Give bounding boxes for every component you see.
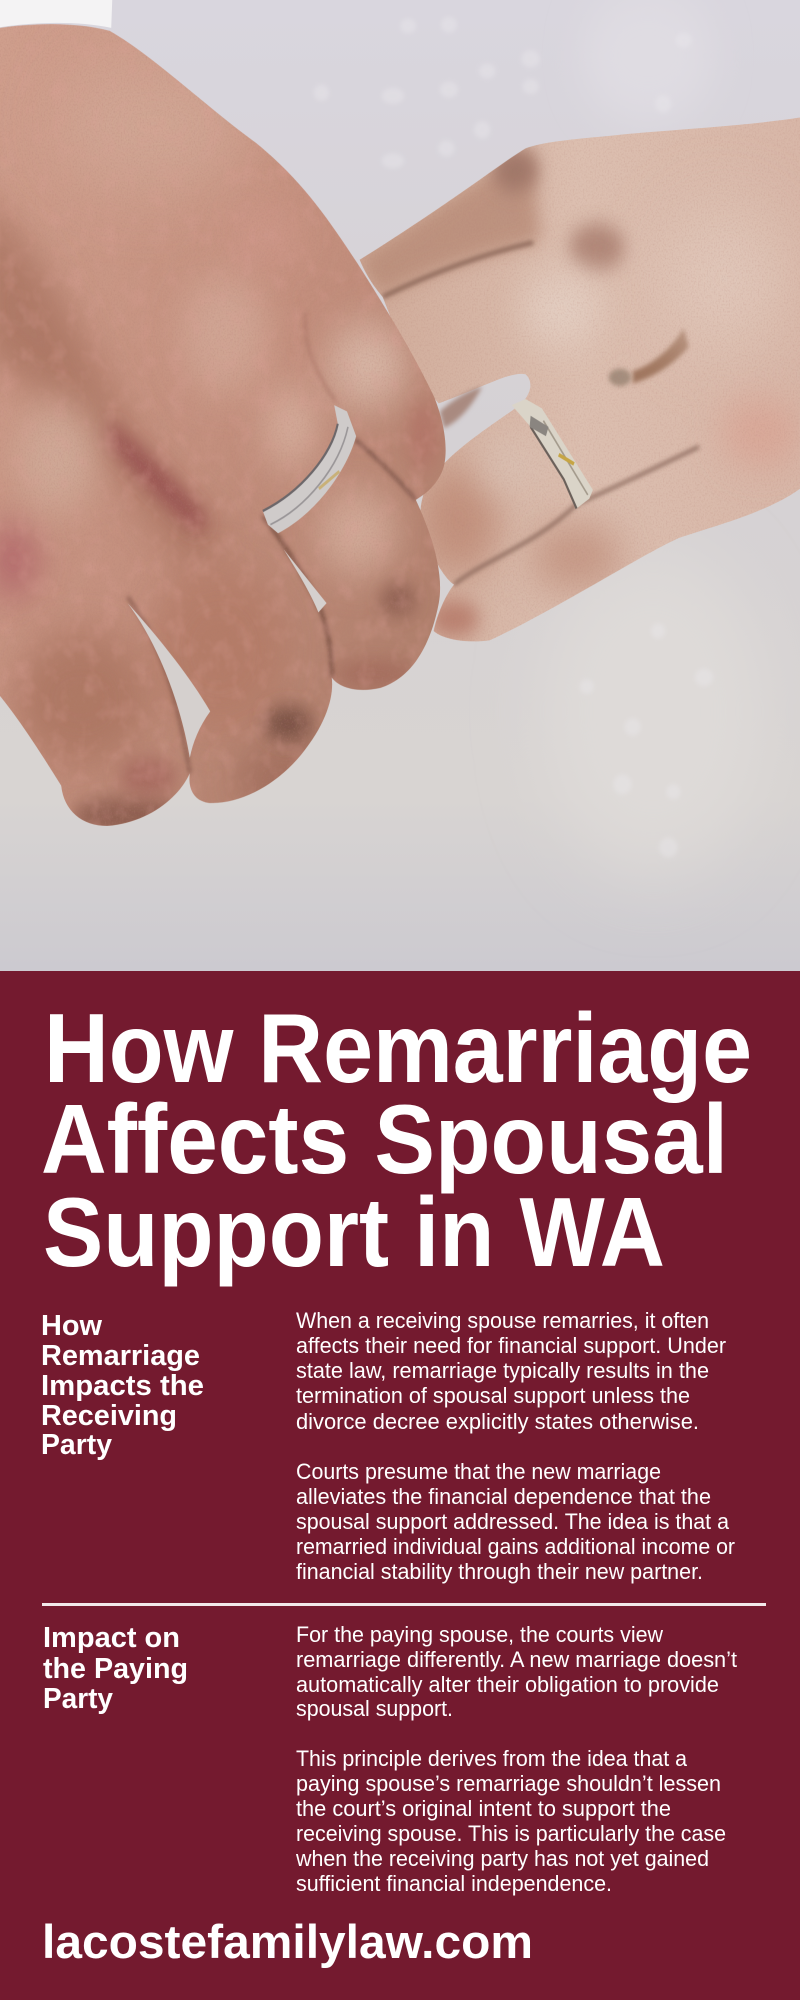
title: How Remarriage [44, 993, 752, 1103]
text block: receiving party, paragraph 1: When a receiving spouse remarries, it often [296, 1308, 709, 1333]
text block: receiving party, paragraph 2: financial stability through their new partner. [296, 1559, 703, 1584]
heading: how remarriage impacts the receiving party: How [41, 1310, 102, 1342]
text block: paying party, paragraph 1: remarriage differently. A new marriage doesn’t [296, 1647, 737, 1672]
ring on right hand [512, 399, 593, 508]
text block: paying party, paragraph 1: For the paying spouse, the courts view [296, 1622, 663, 1647]
heading: impact on the paying party: Impact on [43, 1622, 180, 1654]
text block: paying party, paragraph 2: the court’s original intent to support the [296, 1796, 671, 1821]
text block: receiving party, paragraph 2 [296, 1459, 735, 1584]
gap finger behind [440, 387, 482, 428]
text block: receiving party, paragraph 1: affects their need for financial support. Under [296, 1333, 726, 1358]
text block: receiving party, paragraph 2: Courts presume that the new marriage [296, 1459, 661, 1484]
title: Affects Spousal [41, 1084, 728, 1194]
footer website: lacostefamilylaw.com [42, 1915, 533, 1968]
heading: impact on the paying party [43, 1622, 188, 1715]
text block: paying party, paragraph 2: when the receiving party has not yet gained [295, 1846, 709, 1871]
right hand [357, 111, 800, 650]
heading: how remarriage impacts the receiving party: Remarriage [41, 1340, 200, 1372]
text block: paying party, paragraph 2: receiving spouse. This is particularly the case [296, 1821, 726, 1846]
text block: paying party, paragraph 2 [295, 1746, 726, 1896]
text block: paying party, paragraph 2: sufficient financial independence. [296, 1871, 612, 1896]
title [41, 993, 752, 1287]
text block: paying party, paragraph 1 [296, 1622, 737, 1721]
text block: paying party, paragraph 1: spousal support. [296, 1696, 453, 1721]
text block: receiving party, paragraph 1: divorce decree explicitly states otherwise. [296, 1409, 699, 1434]
heading: how remarriage impacts the receiving party: Impacts the [41, 1370, 204, 1402]
gaps between fingers [128, 549, 327, 758]
shirt cuff [0, 0, 112, 28]
text block: paying party, paragraph 2: paying spouse’s remarriage shouldn’t lessen [296, 1771, 721, 1796]
text block: receiving party, paragraph 2: spousal support addressed. The idea is that a [296, 1509, 730, 1534]
heading: how remarriage impacts the receiving party: Receiving [41, 1400, 177, 1432]
panel: wedding ring photo [0, 0, 800, 971]
text block: receiving party, paragraph 2: remarried individual gains additional income or [296, 1534, 735, 1559]
text block: receiving party, paragraph 1 [296, 1308, 726, 1434]
text block: receiving party, paragraph 2: alleviates the financial dependence that the [296, 1484, 711, 1509]
text block: receiving party, paragraph 1: termination of spousal support unless the [296, 1383, 690, 1408]
ring on left hand [263, 405, 356, 533]
title: Support in WA [43, 1177, 665, 1287]
heading: how remarriage impacts the receiving party: Party [41, 1429, 112, 1461]
heading: impact on the paying party: the Paying [43, 1653, 188, 1685]
left hand [0, 19, 449, 835]
panel: burgundy content area [0, 971, 800, 2000]
heading: how remarriage impacts the receiving party [41, 1310, 204, 1461]
text block: paying party, paragraph 2: This principle derives from the idea that a [296, 1746, 688, 1771]
text block: receiving party, paragraph 1: state law, remarriage typically results in the [296, 1358, 709, 1383]
text block: paying party, paragraph 1: automatically alter their obligation to provide [296, 1672, 719, 1697]
heading: impact on the paying party: Party [43, 1683, 113, 1715]
